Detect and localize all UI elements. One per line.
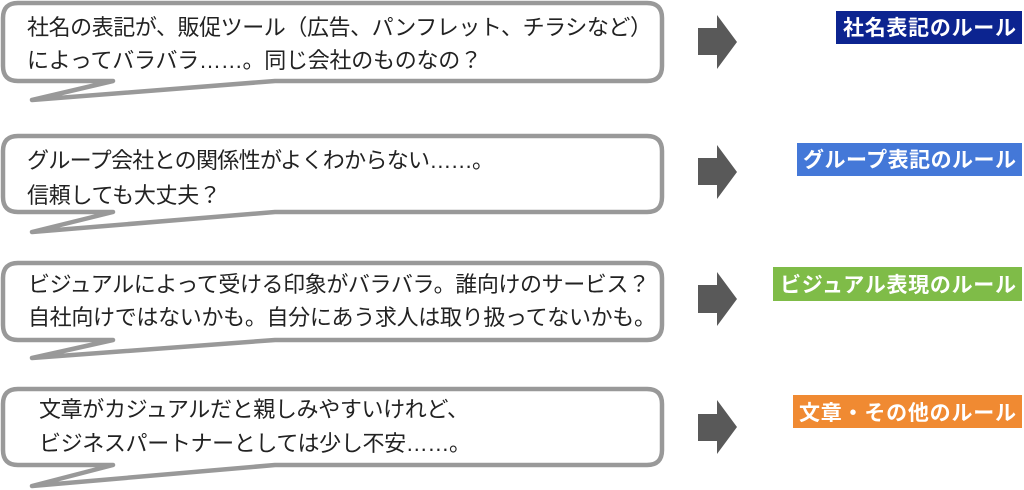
arrow 3 — [698, 272, 737, 326]
bubble 4 text: ビジネスパートナーとしては少し不安……。 — [39, 431, 471, 456]
bubble 3 text: 自社向けではないかも。自分にあう求人は取り扱ってないかも。 — [28, 305, 656, 330]
arrow 1 — [698, 15, 737, 69]
label 2: グループ表記のルール — [803, 148, 1016, 172]
speech bubble 4 — [3, 389, 662, 486]
bubble 1 text — [27, 15, 652, 73]
label 1 — [836, 11, 1022, 44]
speech bubble 1 — [3, 3, 662, 100]
bubble 2 text: グループ会社との関係性がよくわからない……。 — [27, 148, 494, 173]
label 2 — [797, 143, 1022, 176]
bubble 1 text: 社名の表記が、販促ツール（広告、パンフレット、チラシなど） — [27, 15, 652, 40]
bubble 4 text: 文章がカジュアルだと親しみやすいけれど、 — [39, 397, 469, 422]
arrow 4 — [698, 400, 737, 454]
bubble 3 text: ビジュアルによって受ける印象がバラバラ。誰向けのサービス？ — [28, 272, 650, 297]
bubble 4 text — [39, 397, 471, 456]
bubble 2 text — [27, 148, 494, 208]
label 3: ビジュアル表現のルール — [780, 274, 1016, 297]
bubble 1 text: によってバラバラ……。同じ会社のものなの？ — [27, 48, 482, 73]
row 3: visual — [3, 263, 1022, 358]
label 4: 文章・その他のルール — [799, 402, 1016, 425]
row 2: group — [3, 136, 1022, 232]
bubble 2 text: 信頼しても大丈夫？ — [27, 183, 221, 208]
row 1: company name — [3, 3, 1022, 100]
bubble 3 text — [28, 272, 656, 330]
speech bubble 2 — [3, 136, 662, 232]
label 4 — [793, 395, 1022, 428]
speech bubble 3 — [3, 263, 662, 358]
label 3 — [773, 267, 1022, 301]
row 4: writing and other — [3, 389, 1022, 486]
arrow 2 — [698, 145, 737, 199]
label 1: 社名表記のルール — [843, 17, 1016, 40]
